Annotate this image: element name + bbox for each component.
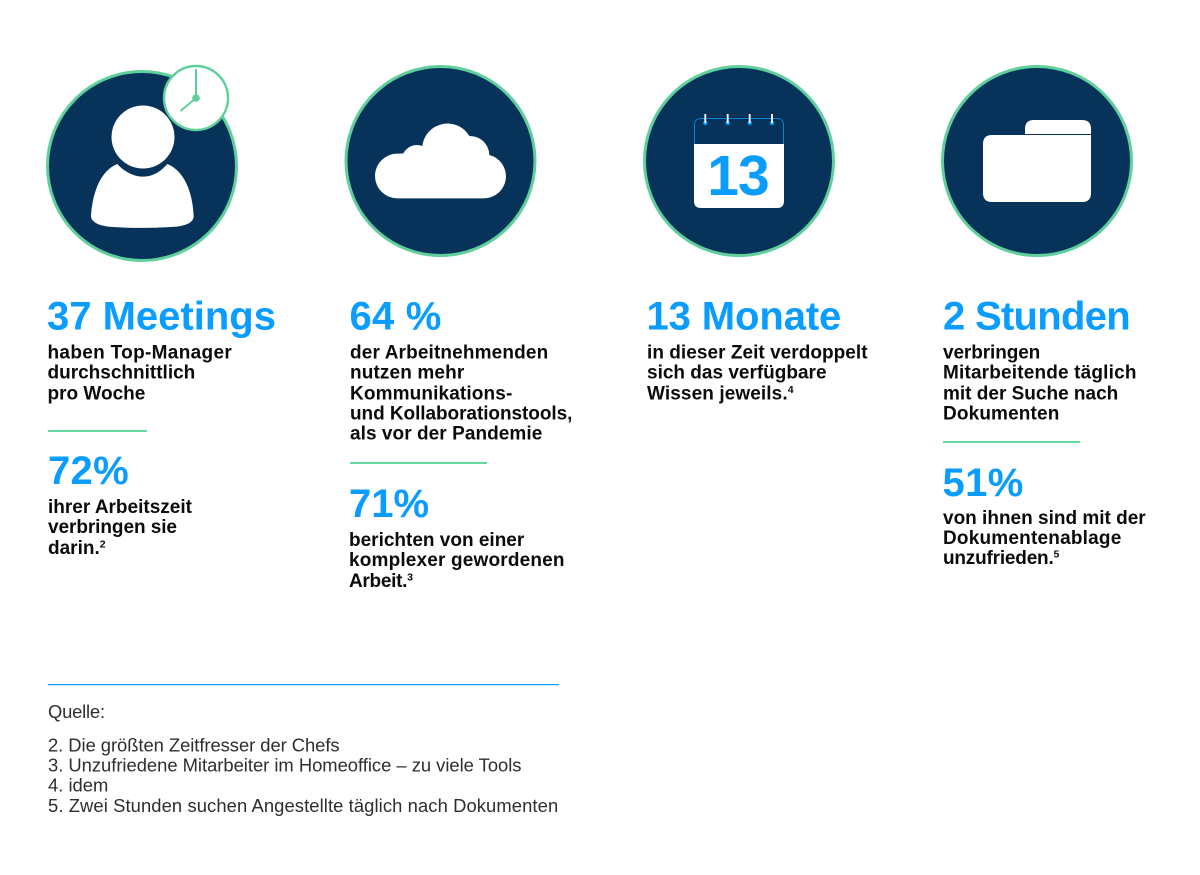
text: 64 % description: und Kollaborationstools, xyxy=(350,403,572,424)
text: 64 % description: nutzen mehr xyxy=(350,362,465,384)
text: 64 % description: Kommunikations- xyxy=(350,383,512,404)
text: 71% description: 3 xyxy=(407,572,413,584)
text: meetings description: durchschnittlich xyxy=(48,362,195,384)
text: 71% description: Arbeit. xyxy=(349,571,413,592)
icon: calendar: 13 xyxy=(707,144,769,208)
icon: folder xyxy=(942,66,1132,256)
text: 2 Stunden description: verbringen xyxy=(943,342,1040,363)
heading: 13 Monate: 13 Monate xyxy=(646,294,841,338)
heading: 37 Meetings: 37 Meetings xyxy=(47,294,276,338)
text: 72% description: ihrer Arbeitszeit xyxy=(48,497,193,518)
text: meetings description: haben Top-Manager xyxy=(48,342,232,363)
text: sources list: 4. idem xyxy=(48,775,108,796)
text: 72% description: verbringen sie xyxy=(48,517,177,538)
heading: 2 Stunden: 2 Stunden xyxy=(943,294,1130,338)
panel: meetings xyxy=(47,66,276,559)
heading: 64 %: 64 % xyxy=(350,294,441,338)
text: 72% description: darin. xyxy=(48,538,106,559)
text: 2 Stunden description: mit der Suche nach xyxy=(943,383,1118,404)
text: sources list: 3. Unzufriedene Mitarbeiter im Homeoffice – zu viele Tools xyxy=(48,754,521,776)
heading: 51%: 51% xyxy=(942,461,1024,505)
text: 13 Monate description: sich das verfügbare xyxy=(647,362,827,384)
panel: documents xyxy=(942,66,1146,569)
text: 51% description: von ihnen sind mit der xyxy=(943,508,1146,529)
text: meetings description: pro Woche xyxy=(48,383,145,404)
heading: 71%: 71% xyxy=(349,482,429,526)
panel: tools xyxy=(346,66,572,592)
text: sources list: 5. Zwei Stunden suchen Angestellte täglich nach Dokumenten xyxy=(48,795,558,816)
text: 51% description: Dokumentenablage xyxy=(943,528,1121,549)
text: 2 Stunden description: Dokumenten xyxy=(943,403,1059,424)
text: 13 Monate description: 4 xyxy=(788,384,794,396)
icon: calendar xyxy=(644,66,834,256)
text: 71% description: komplexer gewordenen xyxy=(349,550,565,571)
text: 64 % description: als vor der Pandemie xyxy=(350,424,542,444)
text: 71% description: berichten von einer xyxy=(349,530,525,551)
text: sources heading: Quelle: xyxy=(48,701,105,722)
icon: person with clock xyxy=(48,66,236,260)
text: sources list: 2. Die größten Zeitfresser der Chefs xyxy=(48,734,340,756)
text: 64 % description: der Arbeitnehmenden xyxy=(350,342,548,363)
text: 13 Monate description: Wissen jeweils. xyxy=(647,383,794,404)
text: 13 Monate description: in dieser Zeit verdoppelt xyxy=(647,342,868,363)
panel: knowledge xyxy=(644,66,868,404)
text: 51% description: unzufrieden. xyxy=(943,548,1060,569)
text: 51% description: 5 xyxy=(1054,548,1060,560)
text: 2 Stunden description: Mitarbeitende täglich xyxy=(943,362,1137,384)
icon: cloud xyxy=(346,66,535,256)
heading: 72%: 72% xyxy=(48,449,129,493)
panel: sources xyxy=(48,684,559,816)
text: 72% description: 2 xyxy=(100,538,106,550)
